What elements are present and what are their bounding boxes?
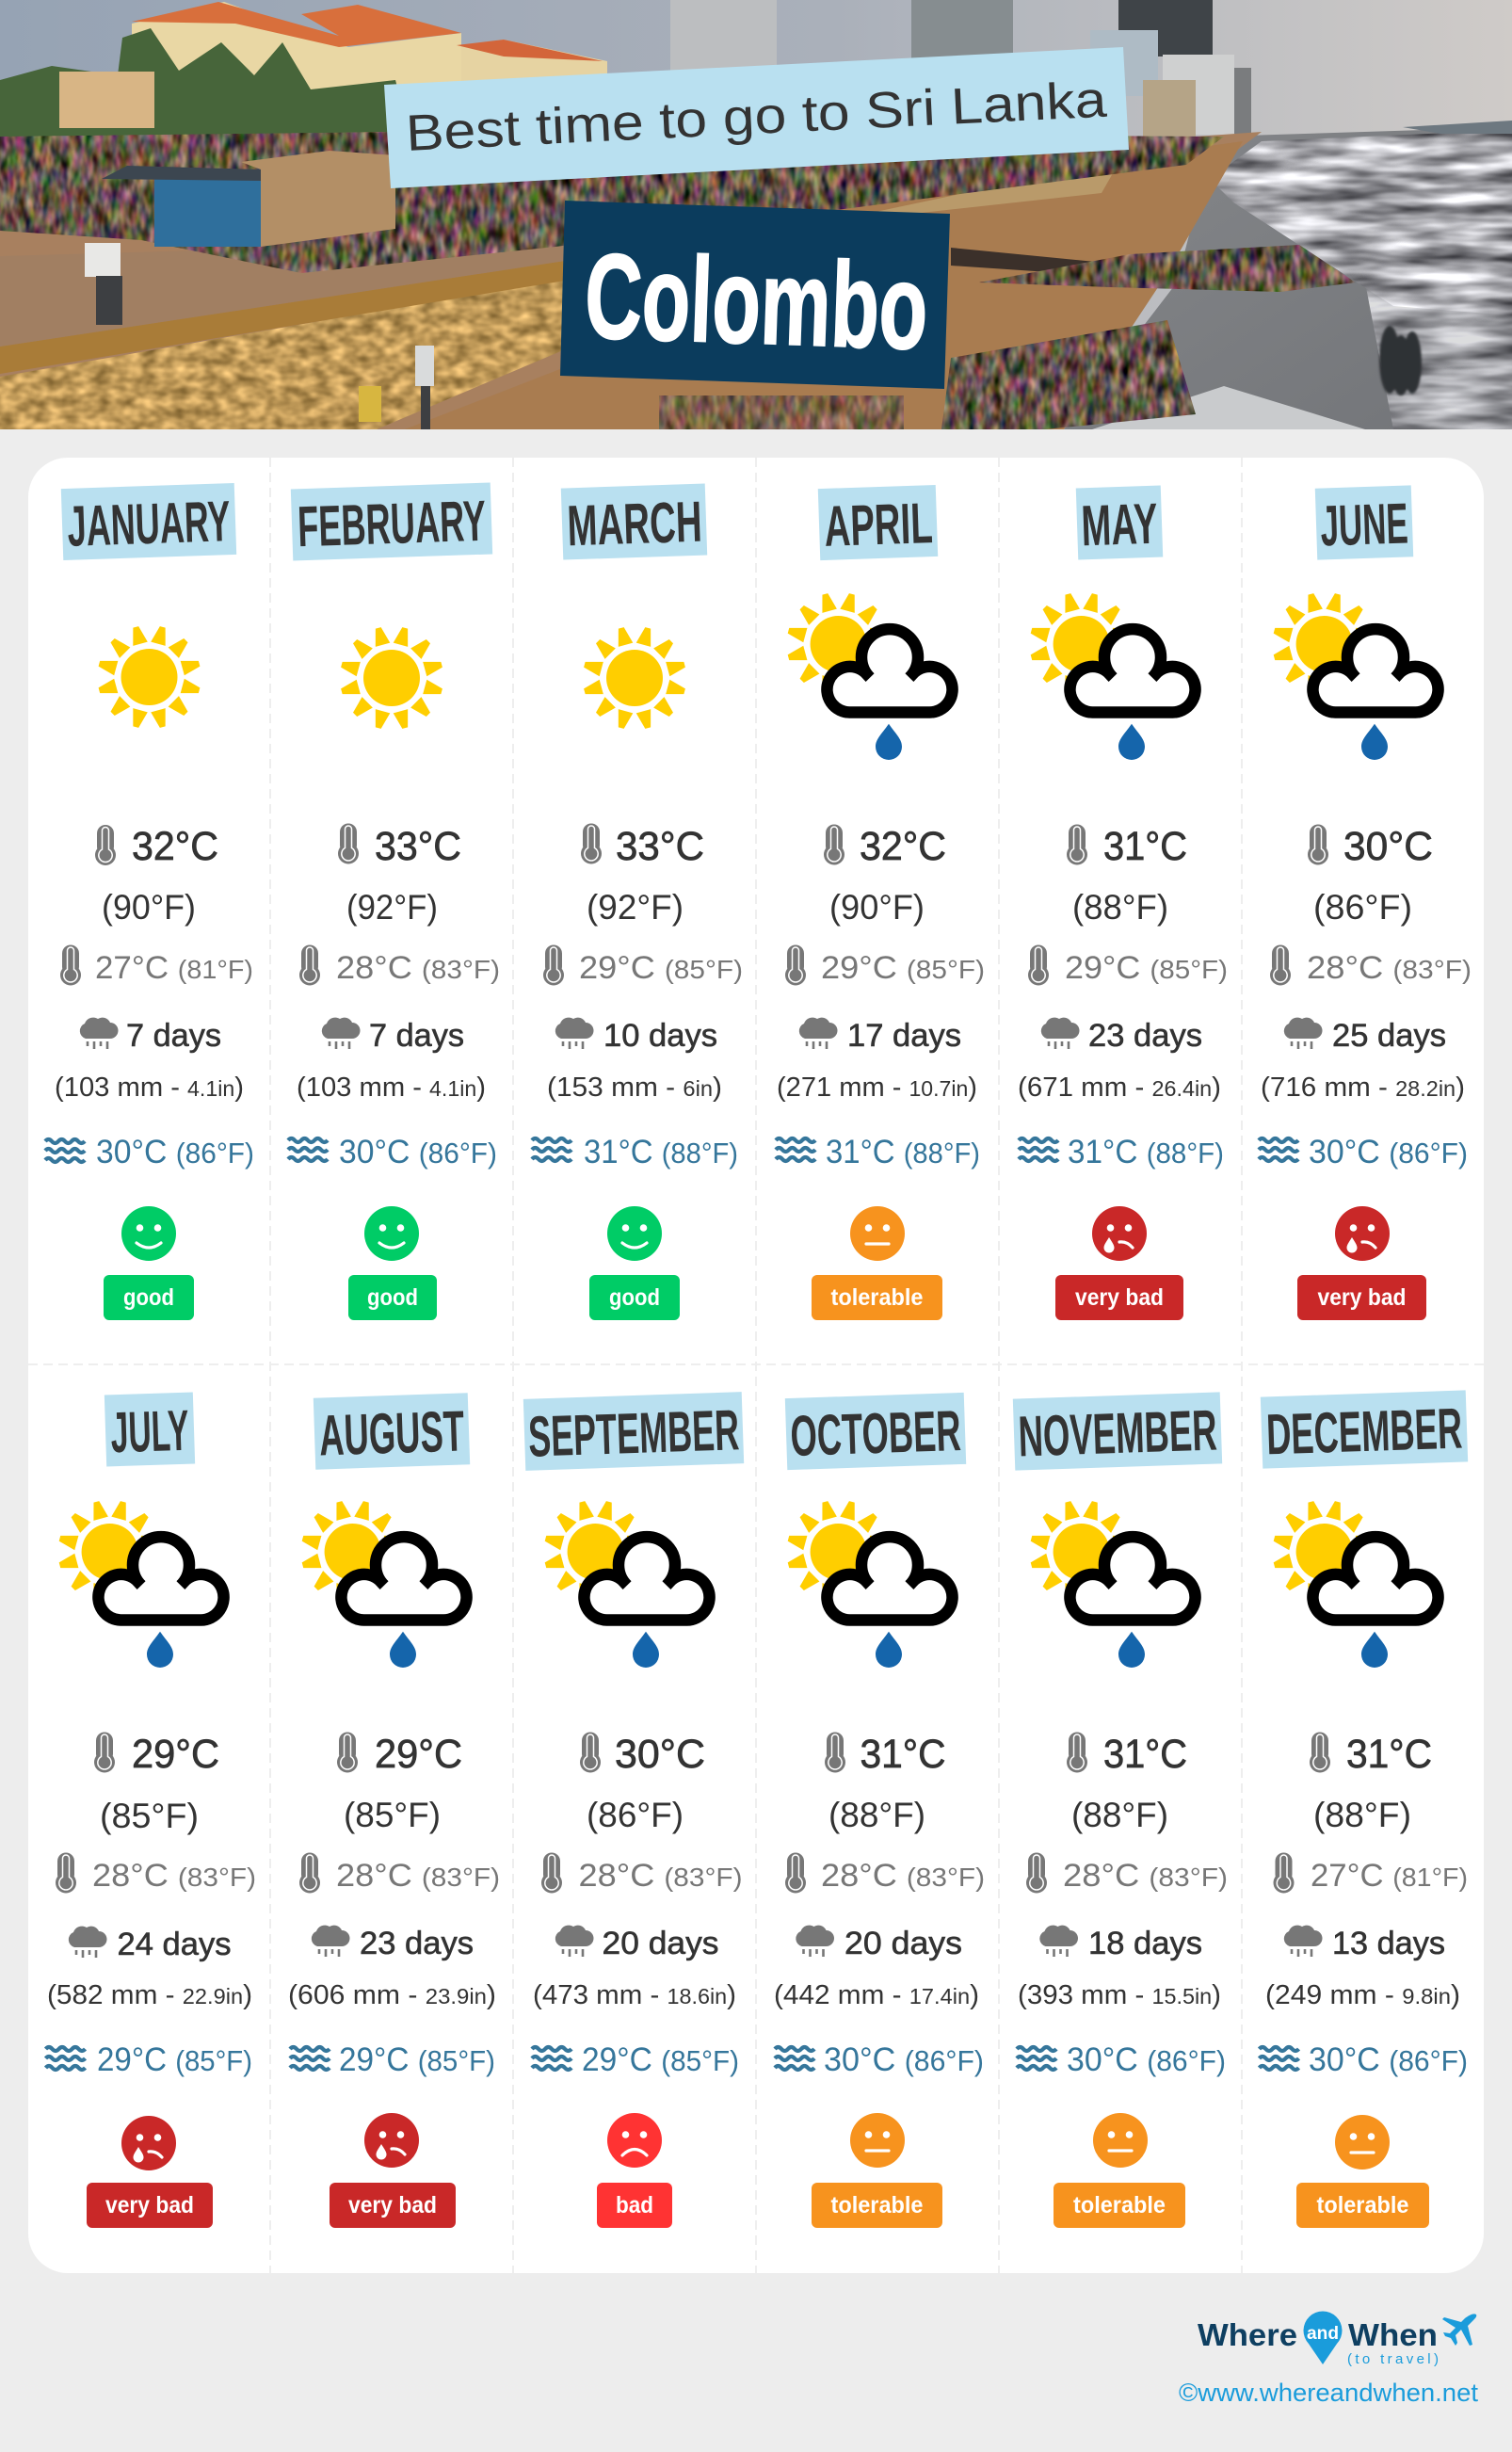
icon: face: [364, 1206, 419, 1261]
logo: Where and When: [1198, 2312, 1476, 2367]
rating badge: tolerable: [830, 2192, 924, 2218]
high temperature: 29°C: [375, 1732, 462, 1777]
high temperature: 32°C: [132, 824, 218, 869]
month label: [61, 483, 236, 560]
month label: AUGUST: [318, 1398, 465, 1468]
rainfall: (442 mm - 17.4in): [774, 1980, 979, 2010]
panel: June: [1259, 485, 1472, 1320]
month label: [105, 1393, 195, 1466]
rainfall: (103 mm - 4.1in): [55, 1073, 244, 1103]
month label: [785, 1393, 966, 1470]
rating badge: [812, 1275, 942, 1320]
icon: waves: [1260, 2047, 1299, 2070]
month label: JANUARY: [66, 489, 232, 558]
rating badge: [1055, 1275, 1183, 1320]
low temperature: 28°C (83°F): [336, 950, 500, 986]
rainfall: (271 mm - 10.7in): [777, 1073, 977, 1103]
high temperature fahrenheit: (88°F): [828, 1796, 925, 1834]
icon: face: [850, 2113, 905, 2168]
header photo: Colombo beach: [0, 0, 1512, 429]
rainy days: 24 days: [117, 1927, 232, 1962]
month label: OCTOBER: [789, 1398, 962, 1468]
month label: JUNE: [1319, 491, 1409, 558]
panel: July: [45, 1393, 256, 2228]
panel: January: [45, 483, 254, 1320]
icon: thermometer: [580, 1733, 601, 1772]
low temperature: 28°C (83°F): [92, 1858, 256, 1894]
icon: low thermometer: [299, 945, 320, 985]
icon: rain cloud: [555, 1018, 593, 1049]
icon: face: [850, 1206, 905, 1261]
icon: rain cloud: [312, 1926, 350, 1957]
icon: thermometer: [94, 1733, 115, 1772]
icon: sun: [97, 625, 201, 729]
icon: waves: [1019, 1138, 1058, 1161]
icon: thermometer: [337, 1733, 358, 1772]
sea temperature: 31°C (88°F): [584, 1134, 738, 1170]
icon: face: [121, 2116, 176, 2170]
sea temperature: 29°C (85°F): [582, 2041, 739, 2078]
icon: sun: [340, 626, 443, 730]
sea temperature: 30°C (86°F): [339, 1134, 497, 1170]
sea temperature: 30°C (86°F): [1067, 2041, 1226, 2078]
rating badge: [1296, 2183, 1429, 2228]
icon: thermometer: [825, 1733, 845, 1772]
title banner: Best time to go to Sri Lanka: [405, 72, 1109, 162]
month label: [561, 484, 707, 560]
low temperature: 28°C (83°F): [1307, 950, 1472, 986]
icon: low thermometer: [541, 1853, 562, 1893]
rainfall: (249 mm - 9.8in): [1265, 1980, 1460, 2010]
low temperature: 28°C (83°F): [578, 1858, 742, 1894]
logo: Where and When: Where: [1198, 2317, 1297, 2352]
panel: December: [1260, 1390, 1468, 2228]
icon: thermometer: [1067, 825, 1087, 864]
rating badge: very bad: [348, 2192, 437, 2218]
month label: MARCH: [566, 490, 703, 557]
panel: October: [774, 1393, 985, 2228]
rainy days: 10 days: [603, 1018, 717, 1054]
icon: thermometer: [824, 825, 844, 864]
icon: face: [607, 1206, 662, 1261]
rainfall: (606 mm - 23.9in): [288, 1980, 496, 2010]
rainy days: 17 days: [847, 1018, 961, 1054]
month label: FEBRUARY: [297, 489, 487, 558]
icon: face: [1335, 2115, 1390, 2170]
panel: November: [1013, 1392, 1228, 2228]
rating badge: [589, 1275, 680, 1320]
rating badge: very bad: [1075, 1284, 1164, 1311]
rating badge: [597, 2183, 672, 2228]
panel: February: [288, 483, 500, 1320]
icon: face: [1092, 1206, 1147, 1261]
rainfall: (716 mm - 28.2in): [1261, 1073, 1465, 1103]
rating badge: very bad: [105, 2192, 194, 2218]
rating badge: bad: [616, 2192, 653, 2218]
rainfall: (103 mm - 4.1in): [297, 1073, 486, 1103]
icon: waves: [775, 2047, 814, 2070]
icon: low thermometer: [1026, 1853, 1047, 1893]
icon: rain cloud: [555, 1926, 593, 1957]
rainfall: (473 mm - 18.6in): [533, 1980, 736, 2010]
high temperature fahrenheit: (86°F): [587, 1796, 684, 1834]
city name banner: [560, 201, 950, 389]
icon: rain cloud: [1284, 1018, 1322, 1049]
low temperature: 29°C (85°F): [821, 950, 985, 986]
high temperature: 31°C: [1103, 824, 1187, 869]
rainy days: 7 days: [369, 1018, 464, 1054]
icon: waves: [1017, 2047, 1056, 2070]
icon: low thermometer: [1270, 945, 1291, 985]
high temperature: 32°C: [860, 824, 946, 869]
rainy days: 25 days: [1332, 1018, 1446, 1054]
high temperature fahrenheit: (90°F): [829, 888, 925, 927]
month label: [1013, 1392, 1222, 1471]
icon: low thermometer: [56, 1853, 76, 1893]
high temperature fahrenheit: (88°F): [1071, 1796, 1168, 1834]
high temperature: 31°C: [1346, 1732, 1432, 1777]
icon: thermometer: [581, 823, 602, 864]
sea temperature: 31°C (88°F): [1068, 1134, 1224, 1170]
month label: [291, 483, 492, 560]
icon: sun, cloud and rain: [1029, 1500, 1196, 1668]
high temperature fahrenheit: (85°F): [344, 1796, 441, 1834]
icon: waves: [45, 1139, 85, 1162]
rainy days: 20 days: [603, 1926, 719, 1961]
high temperature: 31°C: [1103, 1732, 1187, 1777]
icon: waves: [288, 1138, 328, 1161]
rating badge: very bad: [1318, 1284, 1407, 1311]
icon: rain cloud: [322, 1018, 360, 1049]
low temperature: 27°C (81°F): [1311, 1858, 1468, 1894]
icon: low thermometer: [785, 1853, 806, 1893]
rainfall: (153 mm - 6in): [547, 1073, 722, 1103]
title banner: [384, 47, 1129, 188]
rainy days: 20 days: [844, 1926, 962, 1961]
icon: rain cloud: [1039, 1926, 1078, 1957]
rating badge: tolerable: [1073, 2192, 1166, 2218]
low temperature: 27°C (81°F): [95, 950, 253, 986]
icon: rain cloud: [80, 1018, 119, 1049]
panel: monthly grid: [28, 458, 1484, 2273]
icon: sun: [583, 626, 686, 730]
panel: April: [776, 485, 985, 1320]
icon: sun, cloud and rain: [57, 1500, 224, 1668]
sea temperature: 31°C (88°F): [826, 1134, 980, 1170]
high temperature: 33°C: [375, 824, 461, 869]
rainfall: (393 mm - 15.5in): [1018, 1980, 1221, 2010]
logo: Where and When: (to travel): [1347, 2351, 1439, 2367]
icon: sun, cloud and rain: [543, 1500, 710, 1668]
icon: face: [1335, 1206, 1390, 1261]
icon: face: [607, 2113, 662, 2168]
panel: May: [1018, 486, 1228, 1320]
icon: low thermometer: [785, 945, 806, 985]
logo: Where and When: and: [1307, 2324, 1339, 2344]
rating badge: [104, 1275, 194, 1320]
month label: MAY: [1080, 492, 1159, 557]
icon: rain cloud: [796, 1926, 834, 1957]
icon: rain cloud: [1284, 1926, 1322, 1957]
low temperature: 29°C (85°F): [1065, 950, 1228, 986]
rating badge: good: [609, 1284, 660, 1311]
high temperature: 29°C: [132, 1732, 219, 1777]
icon: waves: [532, 2047, 571, 2070]
high temperature fahrenheit: (90°F): [102, 888, 196, 927]
month label: JULY: [110, 1398, 190, 1464]
high temperature fahrenheit: (86°F): [1313, 888, 1412, 927]
rating badge: good: [367, 1284, 418, 1311]
sea temperature: 29°C (85°F): [97, 2041, 252, 2078]
icon: sun, cloud and rain: [786, 592, 953, 760]
rating badge: [1297, 1275, 1426, 1320]
low temperature: 28°C (83°F): [336, 1858, 500, 1894]
month label: [1076, 486, 1163, 559]
icon: waves: [45, 2047, 85, 2070]
icon: face: [121, 1206, 176, 1261]
icon: rain cloud: [799, 1018, 838, 1049]
rating badge: [87, 2183, 213, 2228]
icon: sun, cloud and rain: [300, 1500, 467, 1668]
rainy days: 23 days: [360, 1926, 474, 1961]
icon: thermometer: [1310, 1733, 1330, 1772]
high temperature: 30°C: [1343, 824, 1433, 869]
icon: thermometer: [338, 823, 359, 864]
rating badge: [812, 2183, 942, 2228]
rainfall: (671 mm - 26.4in): [1018, 1073, 1221, 1103]
icon: face: [1093, 2113, 1148, 2168]
sea temperature: 30°C (86°F): [96, 1134, 254, 1170]
icon: thermometer: [1067, 1733, 1087, 1772]
icon: plane: [1442, 2314, 1476, 2346]
high temperature: 30°C: [615, 1732, 705, 1777]
icon: waves: [776, 1138, 815, 1161]
icon: rain cloud: [1041, 1018, 1079, 1049]
month label: [818, 485, 938, 560]
rating badge: [1054, 2183, 1185, 2228]
high temperature fahrenheit: (92°F): [346, 888, 438, 927]
website credit: ©www.whereandwhen.net: [1179, 2379, 1478, 2407]
icon: low thermometer: [1273, 1853, 1294, 1893]
high temperature: 33°C: [616, 824, 704, 869]
icon: face: [364, 2113, 419, 2168]
icon: sun, cloud and rain: [1272, 1500, 1439, 1668]
icon: sun, cloud and rain: [786, 1500, 953, 1668]
icon: low thermometer: [299, 1853, 320, 1893]
high temperature fahrenheit: (88°F): [1313, 1796, 1411, 1834]
month label: [523, 1392, 744, 1471]
icon: waves: [290, 2047, 330, 2070]
rating badge: [348, 1275, 437, 1320]
icon: thermometer: [1308, 825, 1328, 864]
rating badge: tolerable: [1316, 2192, 1409, 2218]
rainy days: 13 days: [1332, 1926, 1445, 1961]
high temperature fahrenheit: (88°F): [1072, 888, 1168, 927]
city name banner: Colombo: [583, 229, 930, 376]
sea temperature: 29°C (85°F): [339, 2041, 495, 2078]
panel: August: [288, 1393, 500, 2228]
icon: low thermometer: [1028, 945, 1049, 985]
rating badge: tolerable: [830, 1284, 924, 1311]
icon: rain cloud: [69, 1927, 107, 1958]
rainfall: (582 mm - 22.9in): [47, 1980, 252, 2010]
icon: low thermometer: [60, 945, 81, 985]
sea temperature: 30°C (86°F): [1309, 2041, 1468, 2078]
low temperature: 28°C (83°F): [821, 1858, 985, 1894]
icon: sun, cloud and rain: [1029, 592, 1196, 760]
icon: map pin: [1304, 2312, 1343, 2364]
logo: Where and When: When: [1348, 2317, 1438, 2352]
month label: [314, 1393, 470, 1470]
month label: APRIL: [823, 491, 934, 558]
panel: March: [532, 484, 743, 1320]
high temperature: 31°C: [861, 1732, 945, 1777]
icon: waves: [532, 1138, 571, 1161]
high temperature fahrenheit: (92°F): [587, 888, 684, 927]
rating badge: [330, 2183, 456, 2228]
icon: sun, cloud and rain: [1272, 592, 1439, 760]
icon: thermometer: [95, 825, 116, 865]
month label: SEPTEMBER: [527, 1397, 740, 1469]
icon: low thermometer: [543, 945, 564, 985]
low temperature: 28°C (83°F): [1063, 1858, 1228, 1894]
low temperature: 29°C (85°F): [579, 950, 743, 986]
month label: [1315, 485, 1413, 560]
rainy days: 18 days: [1088, 1926, 1202, 1961]
rating badge: good: [123, 1284, 174, 1311]
sea temperature: 30°C (86°F): [824, 2041, 984, 2078]
high temperature fahrenheit: (85°F): [100, 1797, 199, 1835]
rainy days: 23 days: [1088, 1018, 1202, 1054]
rainy days: 7 days: [126, 1018, 221, 1054]
panel: September: [523, 1392, 744, 2228]
sea temperature: 30°C (86°F): [1309, 1134, 1468, 1170]
month label: NOVEMBER: [1017, 1398, 1218, 1468]
icon: waves: [1259, 1138, 1298, 1161]
